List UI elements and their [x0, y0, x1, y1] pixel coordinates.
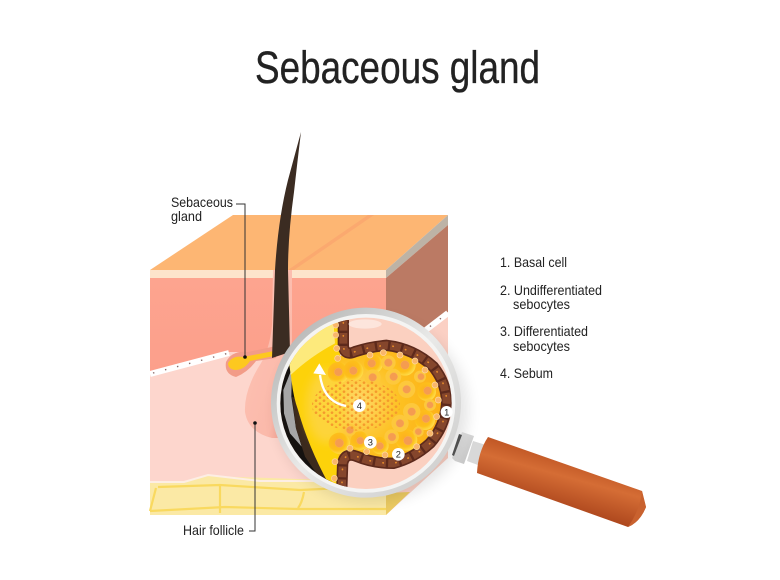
lens contents: [280, 318, 452, 489]
gland body: [338, 351, 441, 458]
hair follicle label: Hair follicle: [183, 522, 244, 538]
magnifying glass handle: [452, 432, 646, 527]
number badge 2: [392, 448, 405, 461]
right side edge: [386, 215, 448, 278]
hair outer black edge: [280, 360, 330, 482]
epidermis edge strip: [150, 270, 386, 278]
lens rim: [271, 308, 461, 498]
number badge 4: [353, 399, 366, 412]
hair grey sheen: [283, 368, 302, 447]
arrow: sebum flow: [313, 363, 346, 406]
hair shaft: [272, 132, 301, 358]
hair dark core: [292, 397, 333, 483]
bright sebocytes: [328, 354, 436, 454]
handle connector: [452, 432, 486, 465]
hair follicle: [245, 270, 300, 438]
duct highlight: [288, 320, 335, 375]
hair follicle label: [183, 421, 257, 538]
sebaceous gland on follicle: [226, 346, 276, 377]
upper dermis: [150, 278, 386, 373]
sebum droplets: [312, 380, 400, 431]
dermis boundary dotted band: [150, 313, 448, 374]
sebocyte nuclei: [334, 359, 433, 450]
sebaceous gland label: [171, 194, 247, 359]
title: Sebaceous gland: [255, 42, 540, 93]
sebaceous gland label: gland: [171, 208, 202, 224]
handle grip: [477, 437, 646, 527]
pale sebocytes: [344, 355, 436, 444]
fat layer: [150, 475, 410, 515]
magnifying lens: [270, 300, 470, 500]
right side dermis: [386, 225, 448, 360]
skin crease: [288, 215, 374, 270]
handle end cap: [628, 491, 646, 527]
right side lower dermis: [386, 312, 448, 515]
sebum duct yellow: [290, 317, 342, 490]
lens glare: [348, 319, 382, 329]
numbered legend: 1. Basal cell: [500, 254, 567, 270]
numbered legend: 2. Undifferentiated: [500, 282, 602, 298]
number badge 4: 4: [357, 401, 362, 411]
numbered legend: sebocytes: [513, 296, 570, 312]
skin cross-section block: [150, 132, 448, 515]
numbered legend: sebocytes: [513, 338, 570, 354]
small cells along wall: [331, 322, 441, 481]
numbered legend: 4. Sebum: [500, 365, 553, 381]
lens shadow: [276, 318, 468, 502]
number badge 3: [364, 436, 377, 449]
numbered legend: 3. Differentiated: [500, 323, 588, 339]
glow between duct and gland: [307, 370, 347, 443]
lens background: [280, 318, 452, 489]
sebaceous gland label: Sebaceous: [171, 194, 233, 210]
basal cell wall: [342, 320, 447, 492]
number badge 3: 3: [368, 438, 373, 448]
lower dermis: [150, 352, 386, 490]
number badge 2: 2: [396, 450, 401, 460]
number badge 1: [441, 406, 453, 418]
number badge 1: 1: [444, 407, 449, 417]
numbered legend: [500, 254, 602, 381]
skin top surface: [150, 215, 448, 270]
